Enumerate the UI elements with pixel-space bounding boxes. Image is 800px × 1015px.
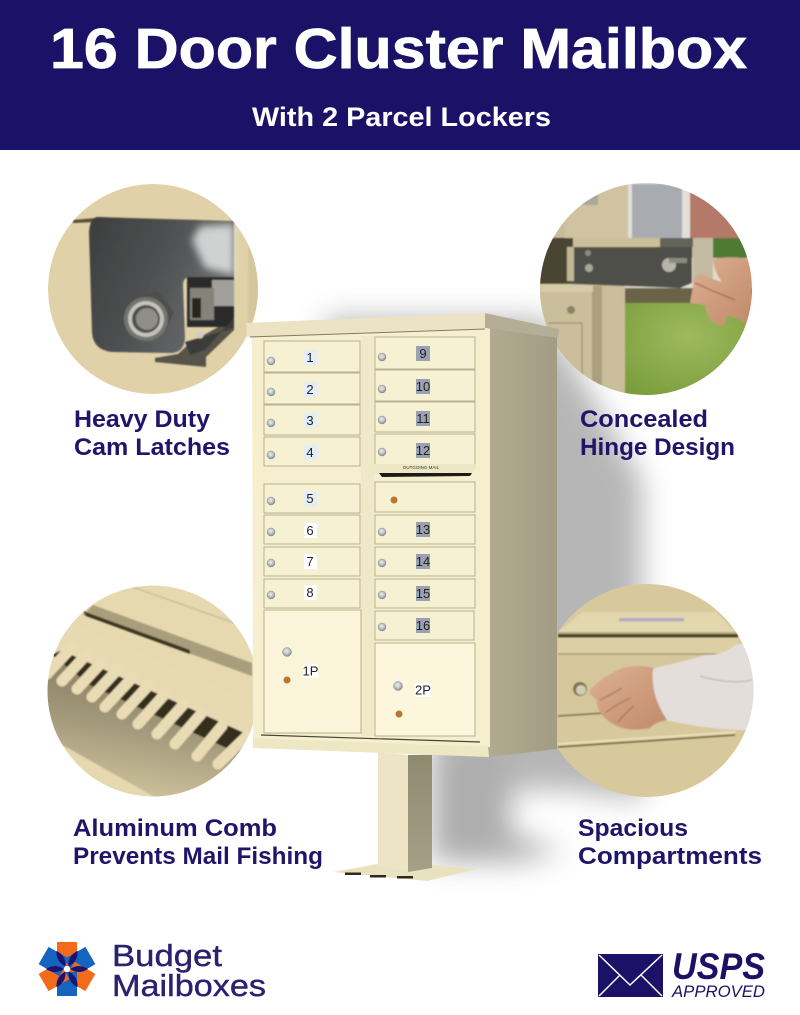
pedestal post — [333, 752, 477, 881]
label: aluminum comb: Aluminum Comb — [73, 815, 277, 842]
logo wordmark: Mailboxes — [112, 968, 266, 1003]
photo circle: aluminum comb — [40, 586, 258, 800]
cabinet front — [252, 326, 490, 747]
label: aluminum comb: Prevents Mail Fishing — [73, 843, 323, 870]
lower frame panel — [538, 284, 625, 396]
bottom sill — [253, 738, 489, 757]
right door column — [375, 337, 475, 736]
door frame — [595, 184, 628, 240]
usps approved mark: APPROVED — [671, 982, 765, 1001]
mailbox unit — [246, 313, 559, 881]
label: concealed hinge: Concealed — [580, 406, 708, 433]
mailbox cast shadow — [325, 318, 642, 862]
icon: envelope — [598, 954, 663, 997]
grey number labels: 9 — [419, 346, 427, 361]
hedge — [713, 238, 753, 258]
label: spacious compartments: Spacious — [578, 815, 688, 842]
label: cam latches: Heavy Duty — [74, 406, 211, 433]
keyholes — [267, 353, 402, 690]
grey number labels: 14 — [416, 554, 430, 569]
parcel locker labels — [303, 664, 431, 698]
dark interior — [538, 238, 573, 284]
grey number labels: 15 — [416, 586, 430, 601]
hinge bracket — [567, 247, 692, 288]
white number labels: 4 — [306, 445, 314, 460]
center column — [361, 336, 374, 736]
grey number labels — [416, 346, 430, 633]
white number labels: 6 — [306, 523, 314, 538]
title: 16 Door Cluster Mailbox — [50, 17, 747, 81]
label: spacious compartments: Compartments — [578, 843, 762, 870]
glossy highlight — [192, 224, 234, 275]
pull tab — [693, 238, 713, 294]
shaded band under comb — [48, 664, 238, 796]
white number labels: 5 — [306, 491, 314, 506]
white number labels: 2 — [306, 382, 314, 397]
grey number labels: 11 — [416, 411, 430, 426]
comb teeth — [47, 647, 246, 764]
white number labels: 3 — [306, 413, 314, 428]
left door column — [264, 341, 361, 733]
house window — [632, 184, 682, 238]
top beam — [573, 238, 663, 247]
photo circle: cam latch — [48, 180, 260, 400]
white number labels — [304, 350, 317, 600]
ridge highlight — [67, 630, 252, 712]
white number labels: 8 — [306, 585, 314, 600]
white number labels: 7 — [306, 554, 314, 569]
mail flap — [558, 612, 735, 632]
cabinet side — [485, 326, 557, 757]
grey number labels: 13 — [416, 522, 430, 537]
outgoing mail flap: OUTGOING MAIL — [403, 465, 440, 470]
grey number labels: 10 — [416, 379, 430, 394]
comb base — [56, 623, 252, 734]
roof cap — [246, 313, 559, 338]
fist — [590, 666, 667, 730]
photo circle: compartment — [557, 584, 754, 797]
brick wall — [689, 192, 740, 240]
dark band behind teeth — [52, 648, 250, 758]
icon: budget mailboxes logo mark — [39, 942, 95, 996]
header banner — [0, 0, 800, 150]
usps approved mark: USPS — [672, 946, 765, 987]
door panels — [558, 638, 738, 654]
grey number labels: 16 — [416, 618, 430, 633]
sleeve — [652, 640, 760, 730]
recessed channel — [83, 605, 252, 676]
subtitle: With 2 Parcel Lockers — [252, 102, 551, 132]
foot of latch bracket — [154, 326, 235, 368]
label: cam latches: Cam Latches — [74, 434, 230, 461]
lock nut — [122, 291, 174, 341]
flap lettering — [619, 618, 684, 622]
parcel locker labels: 2P — [415, 682, 431, 698]
dark steel plate — [89, 217, 234, 353]
white number labels: 1 — [306, 350, 314, 365]
grey number labels: 12 — [416, 443, 430, 458]
brass parcel locks — [284, 496, 402, 718]
parcel locker labels: 1P — [303, 664, 318, 678]
lawn — [624, 303, 754, 398]
outgoing mail flap — [369, 464, 476, 477]
lock — [573, 682, 587, 696]
latch mechanism — [185, 277, 234, 355]
usps approved mark — [671, 946, 765, 1001]
label: concealed hinge: Hinge Design — [580, 434, 735, 461]
hand — [690, 257, 752, 325]
photo circle: concealed hinge — [538, 180, 754, 398]
logo wordmark: Budget — [112, 938, 222, 973]
